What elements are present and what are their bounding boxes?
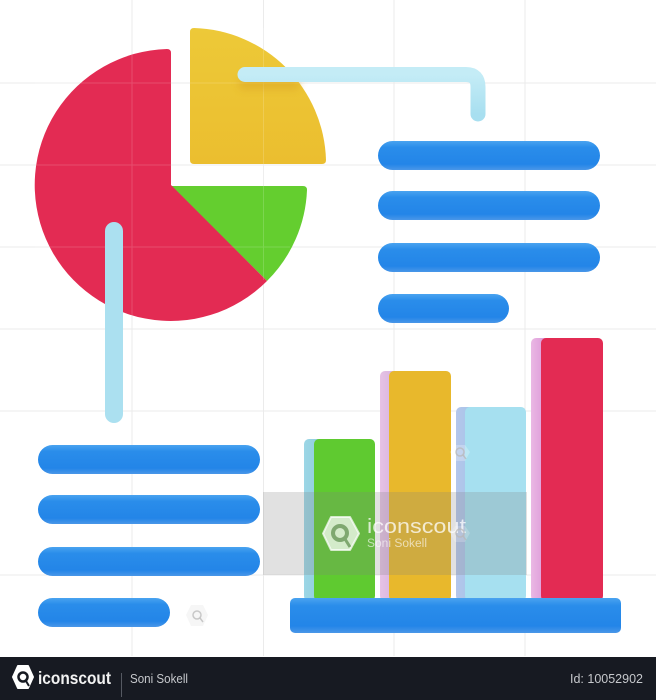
connector: pie to lower text [105,231,123,414]
footer bar [0,657,656,700]
connector shadow on yellow slice [238,78,300,90]
connector: pie to upper text [245,74,478,114]
footer id: Id: 10052902 [570,672,643,686]
watermark logo [323,517,359,550]
pie slice: yellow [190,28,326,164]
footer logo icon [13,666,33,688]
grid lines through pie [35,28,326,316]
watermark text: iconscout [367,515,466,538]
bar: light blue [456,407,526,601]
watermark band [263,492,527,575]
footer author: Soni Sokell [130,672,188,686]
footer brand name: iconscout [38,668,111,688]
pie chart [35,28,326,321]
pie slice: red [35,49,267,321]
bar chart [290,338,621,633]
small watermark icons [186,445,470,626]
pie slice: green [171,186,307,281]
watermark text [367,515,466,550]
bar: yellow [380,371,451,601]
watermark text: Soni Sokell [367,538,427,550]
text lines: upper right [378,141,600,323]
footer divider [121,673,122,697]
bar: green [304,439,375,601]
bar: red [531,338,603,601]
chart base [290,598,621,633]
text lines: lower left [38,445,260,627]
